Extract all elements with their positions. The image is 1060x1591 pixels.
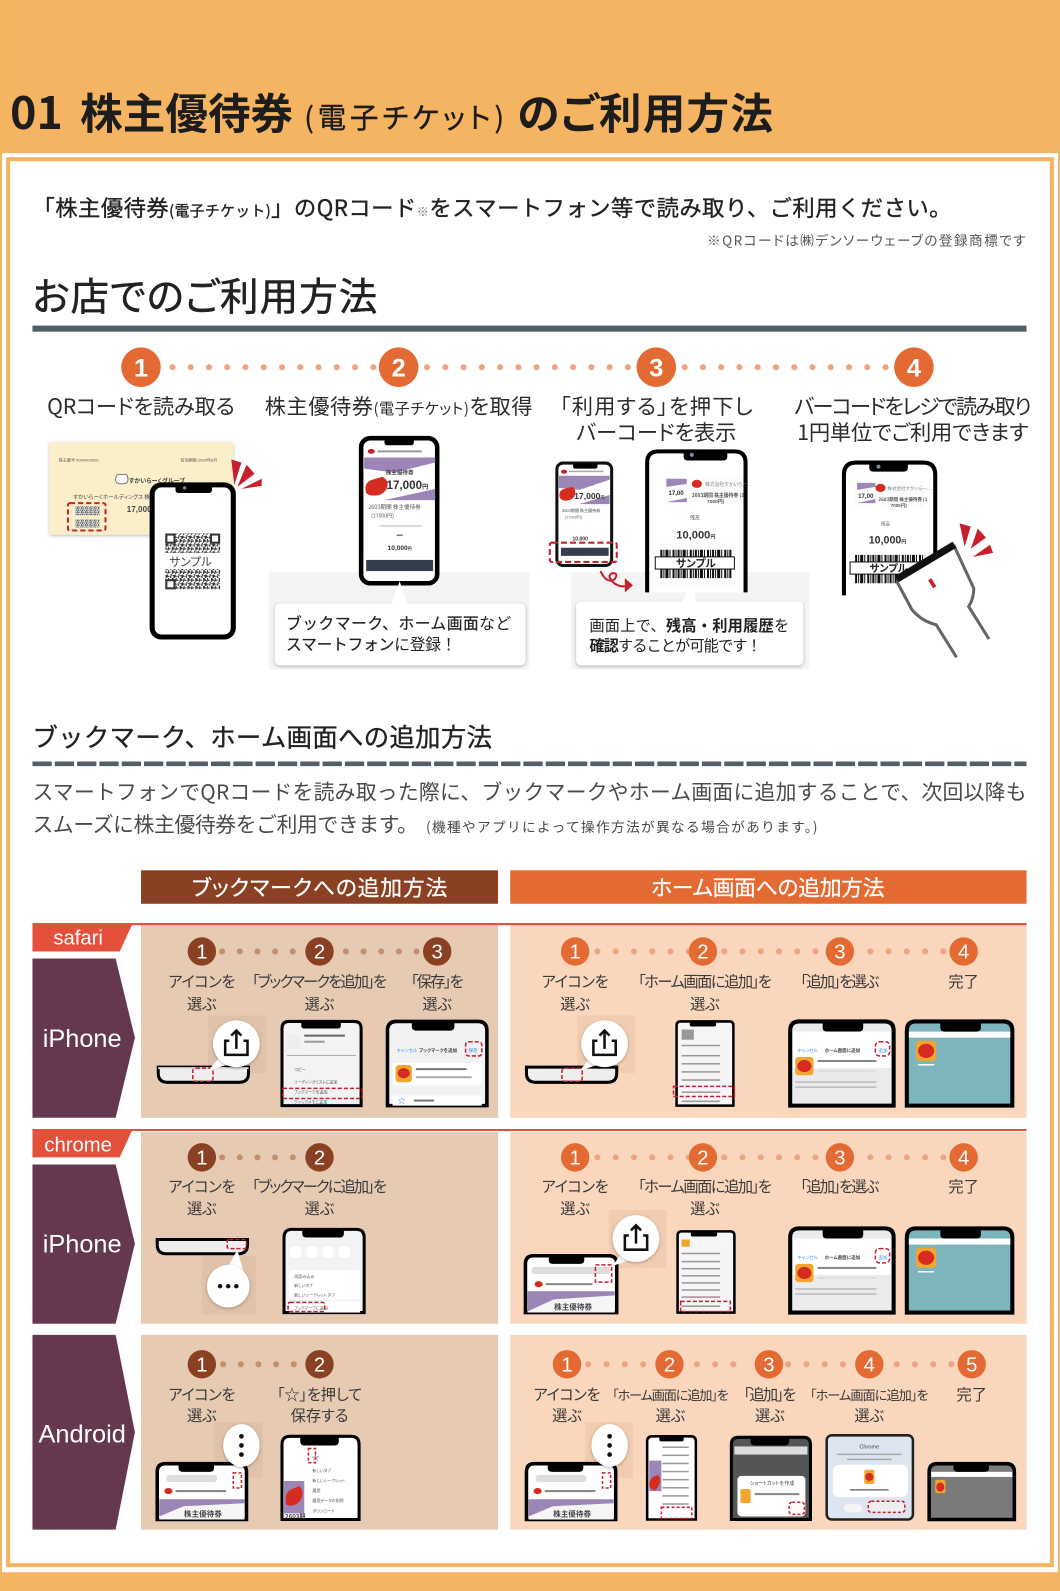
highlight: red dashed box xyxy=(550,543,617,562)
step numbers xyxy=(121,347,934,387)
column header: bookmark: ブックマークへの追加方法 xyxy=(192,872,448,903)
illustration: small phone with button: 10,000 xyxy=(572,537,588,543)
arrow: red curl xyxy=(600,571,633,592)
android bookmark steps: 2 xyxy=(314,1354,325,1376)
illustration: phone with QR: サンプル xyxy=(169,553,213,570)
illustration: phone with barcode: 残高 xyxy=(690,514,700,521)
callout background: step 2 xyxy=(269,572,529,669)
title: (電子チケット) xyxy=(304,96,504,137)
illustration: phone with ticket: 10,000円 xyxy=(388,545,412,552)
android home steps: 選ぶ xyxy=(755,1404,785,1426)
step labels: バーコードを表示 xyxy=(576,416,736,447)
safari bookmark steps: 「保存」を xyxy=(411,970,464,992)
callout background: step 3 xyxy=(571,572,809,669)
safari home illustrations: 追加 xyxy=(878,1047,888,1054)
android bookmark illustrations: 新しいタブ xyxy=(312,1467,331,1474)
illustration: small phone with button: (17000円) xyxy=(565,515,583,519)
chrome bookmark illustrations xyxy=(157,1229,364,1315)
step labels: 1円単位でご利用できます xyxy=(797,416,1029,447)
illustration: barcode scanner xyxy=(897,545,989,657)
chrome bookmark steps: アイコンを xyxy=(168,1175,235,1197)
android home illustrations: Chrome xyxy=(859,1444,879,1450)
illustration: QR ticket card: 有効期限 2026年8月 xyxy=(181,457,217,463)
chrome home steps: 選ぶ xyxy=(690,1197,720,1219)
android bookmark steps xyxy=(168,1350,362,1426)
illustration: phone at register: 2603期間 株主優待券 (1 xyxy=(878,496,928,503)
safari bookmark illustrations: キャンセル xyxy=(396,1048,418,1054)
step labels: バーコードをレジで読み取り xyxy=(794,390,1032,421)
callout: balance: 確認することが可能です！ xyxy=(589,634,762,656)
chrome bookmark steps: 「ブックマークに追加」を xyxy=(252,1175,387,1197)
chrome home steps: 2 xyxy=(697,1147,709,1169)
android bookmark illustrations: ダウンロード xyxy=(312,1507,335,1514)
illustration: QR ticket card: 株主番号 0000000000 xyxy=(59,457,99,463)
android home steps: 「ホーム画面に追加」を xyxy=(810,1385,929,1404)
illustration: phone at register: 17,00 xyxy=(858,493,874,500)
safari bookmark illustrations: ブックマークを追加 xyxy=(294,1088,328,1095)
android home steps: 4 xyxy=(864,1354,875,1376)
safari home illustrations: キャンセル xyxy=(797,1048,818,1054)
chrome home steps: 選ぶ xyxy=(560,1197,590,1219)
android home steps: 1 xyxy=(561,1354,573,1376)
safari bookmark steps: 1 xyxy=(196,942,208,964)
chrome bookmark illustrations: ブックマークに追加 xyxy=(294,1305,328,1312)
android home steps: 「ホーム画面に追加」を xyxy=(612,1385,729,1404)
intro sentence: 「株主優待券(電子チケット)」のQRコード※をスマートフォン等で読み取り、ご利用ください。 xyxy=(32,191,951,223)
safari bookmark illustrations: リーディングリストに追加 xyxy=(294,1078,337,1085)
android bookmark steps: 「☆」を押して xyxy=(277,1383,362,1405)
chrome home steps: 完了 xyxy=(948,1175,979,1197)
callout: balance xyxy=(576,581,803,665)
illustration: phone at register: 残高 xyxy=(881,520,891,527)
safari bookmark steps: 選ぶ xyxy=(422,992,452,1014)
safari bookmark illustrations: コピー xyxy=(294,1067,306,1073)
android bookmark illustrations: ☆ xyxy=(311,1454,320,1463)
safari home steps: 「追加」を選ぶ xyxy=(800,970,880,992)
android bookmark illustrations xyxy=(157,1422,359,1520)
trademark note: ※QRコードは㈱デンソーウェーブの登録商標です xyxy=(707,229,1026,249)
android home steps: 選ぶ xyxy=(656,1404,685,1426)
callout: register: スマートフォンに登録！ xyxy=(286,632,456,655)
android home illustrations: ショートカットを作成 xyxy=(750,1480,794,1487)
row label: Android xyxy=(32,1335,135,1530)
chrome home steps: アイコンを xyxy=(542,1175,609,1197)
illustration: phone with barcode: サンプル xyxy=(676,556,716,571)
paragraph: (機種やアプリによって操作方法が異なる場合があります。) xyxy=(426,816,818,836)
illustration: phone with ticket: (17000円) xyxy=(371,513,394,519)
safari bookmark steps: 2 xyxy=(314,942,325,964)
callout: register xyxy=(275,581,525,665)
row label: Android: Android xyxy=(38,1420,126,1448)
illustration: phone with barcode: 株式会社すかいらー... xyxy=(705,481,751,488)
chrome home illustrations: 追加 xyxy=(878,1254,888,1261)
safari bookmark illustrations: 保存 xyxy=(469,1047,478,1054)
column header: home screen xyxy=(510,870,1027,904)
illustration: QR ticket card: すかいらーくグループ xyxy=(129,476,185,485)
icon: scanner sparkle xyxy=(960,523,993,557)
step numbers: 4 xyxy=(907,354,921,382)
paragraph: スムーズに株主優待券をご利用できます。 xyxy=(32,808,418,838)
safari home steps: 選ぶ xyxy=(560,992,590,1014)
android home steps: 選ぶ xyxy=(854,1404,884,1426)
step numbers: 2 xyxy=(392,354,406,382)
safari bookmark steps: 3 xyxy=(432,942,443,964)
android home illustrations xyxy=(526,1422,1014,1519)
chrome bookmark illustrations: 新しいタブ xyxy=(294,1282,313,1289)
illustration: phone with QR xyxy=(152,485,233,637)
chrome home steps: 1 xyxy=(569,1147,581,1169)
chrome home illustrations: キャンセル xyxy=(797,1255,818,1261)
chrome bookmark steps xyxy=(168,1143,387,1219)
callout: balance: 画面上で、残高・利用履歴を xyxy=(589,614,789,636)
illustration: small phone with button xyxy=(557,463,612,565)
chrome home illustrations xyxy=(525,1210,1012,1313)
illustration: phone with ticket: 17,000円 xyxy=(386,479,428,492)
android home steps: 「追加」を xyxy=(744,1383,796,1405)
illustration: phone with ticket: 株主優待券 xyxy=(386,469,414,477)
paragraph xyxy=(32,775,1027,838)
chrome bookmark steps: 2 xyxy=(314,1147,325,1169)
android bookmark illustrations: 株主優待券 xyxy=(184,1508,222,1519)
column header: home screen: ホーム画面への追加方法 xyxy=(651,872,885,903)
tag: chrome xyxy=(32,1129,1027,1157)
tag: safari xyxy=(32,923,1027,951)
safari bookmark steps: アイコンを xyxy=(168,970,235,992)
safari bookmark illustrations: ブックマークを追加 xyxy=(419,1047,458,1054)
safari bookmark steps xyxy=(168,937,464,1014)
safari home steps: 3 xyxy=(834,942,846,964)
android bookmark steps: 選ぶ xyxy=(187,1404,217,1426)
row label: iPhone chrome xyxy=(32,1164,135,1324)
illustration: QR ticket card: すかいらーくホールディングス 株主 xyxy=(73,493,156,501)
chrome home steps: 4 xyxy=(958,1147,969,1169)
chrome home illustrations: ホーム画面に追加 xyxy=(825,1254,861,1261)
heading: store usage: お店でのご利用方法 xyxy=(32,266,377,322)
step labels: QRコードを読み取る xyxy=(47,390,235,421)
step numbers: 3 xyxy=(649,354,663,382)
row label: iPhone chrome: iPhone xyxy=(43,1231,122,1259)
title xyxy=(10,77,773,142)
illustration: QR ticket card: 17,000 xyxy=(127,505,152,514)
title: のご利用方法 xyxy=(517,81,773,142)
android home steps: 5 xyxy=(966,1354,977,1376)
chrome bookmark steps: 1 xyxy=(196,1147,208,1169)
android home steps: 完了 xyxy=(957,1383,987,1405)
safari home steps: 4 xyxy=(958,942,969,964)
illustration: small phone with button: 17,000円 xyxy=(574,491,605,501)
chrome bookmark illustrations: 新しいシークレット タブ xyxy=(294,1291,335,1298)
step numbers: 1 xyxy=(134,354,148,382)
safari home illustrations: ホーム画面に追加 xyxy=(825,1047,861,1054)
column header: bookmark xyxy=(141,870,498,904)
illustration: phone with barcode: 7000円) xyxy=(707,499,725,505)
android bookmark illustrations: 新しいシークレット xyxy=(312,1477,345,1484)
chrome home steps: 「追加」を選ぶ xyxy=(800,1175,880,1197)
illustration: QR ticket card xyxy=(50,442,233,535)
chrome home steps xyxy=(542,1143,979,1219)
safari home steps: 完了 xyxy=(948,970,979,992)
paragraph: スマートフォンでQRコードを読み取った際に、ブックマークやホーム画面に追加することで、次回以降も xyxy=(32,775,1027,805)
android bookmark steps: 保存する xyxy=(291,1404,348,1426)
illustration: phone at register: 7000円) xyxy=(891,503,907,508)
safari home steps: 選ぶ xyxy=(690,992,720,1014)
android bookmark illustrations: 履歴データの削除 xyxy=(312,1497,344,1504)
android home steps: アイコンを xyxy=(534,1383,600,1405)
android home steps xyxy=(534,1350,987,1426)
illustration: phone at register: サンプル xyxy=(870,560,908,575)
subheading: add methods: ブックマーク、ホーム画面への追加方法 xyxy=(32,719,492,755)
illustration: phone with barcode: 2603期間 株主優待券 (1 xyxy=(692,492,744,499)
android home steps: 3 xyxy=(763,1354,775,1376)
safari home steps: 「ホーム画面に追加」を xyxy=(638,970,772,992)
chrome bookmark steps: 選ぶ xyxy=(305,1197,334,1219)
safari bookmark steps: 選ぶ xyxy=(187,992,217,1014)
chrome bookmark illustrations: 再読み込み xyxy=(294,1273,314,1280)
illustration: phone at register: 10,000円 xyxy=(869,535,906,547)
android bookmark steps: 1 xyxy=(196,1354,208,1376)
chrome home steps: 3 xyxy=(834,1147,846,1169)
step labels xyxy=(47,390,1032,447)
safari bookmark illustrations xyxy=(158,1015,487,1106)
safari home steps: 1 xyxy=(569,942,581,964)
safari home steps: アイコンを xyxy=(542,970,609,992)
chrome home illustrations: 株主優待券 xyxy=(554,1302,592,1313)
row label: iPhone safari: iPhone xyxy=(43,1025,122,1053)
illustration: small phone with button: 2603期間 株主優待券 xyxy=(562,507,600,514)
dashed rule xyxy=(32,762,1027,766)
illustration: phone with barcode: 17,00 xyxy=(668,490,684,497)
panels xyxy=(141,925,1027,1530)
illustration: phone with barcode xyxy=(647,451,751,592)
android bookmark illustrations: 2603期 xyxy=(285,1511,305,1520)
chrome home steps: 「ホーム画面に追加」を xyxy=(638,1175,772,1197)
step connector dots xyxy=(172,364,890,370)
android home illustrations: 株主優待券 xyxy=(553,1508,591,1519)
illustration: phone at register xyxy=(844,463,935,595)
title: 株主優待券 xyxy=(80,81,293,142)
illustration: phone with ticket: 2603期間 株主優待券 xyxy=(368,503,421,511)
tag: safari: safari xyxy=(53,927,103,949)
safari bookmark illustrations: クイックメモに追加 xyxy=(294,1099,327,1106)
safari bookmark illustrations: ☆ xyxy=(398,1097,406,1106)
android bookmark steps: アイコンを xyxy=(168,1383,235,1405)
android bookmark illustrations: 履歴 xyxy=(312,1487,321,1494)
safari bookmark steps: 「ブックマークを追加」を xyxy=(252,970,387,992)
safari home steps: 2 xyxy=(697,942,709,964)
title: 01 xyxy=(10,77,63,142)
safari home steps xyxy=(542,937,979,1014)
chrome bookmark steps: 選ぶ xyxy=(187,1197,217,1219)
step labels: 「利用する」を押下し xyxy=(560,390,753,421)
android home steps: 2 xyxy=(664,1354,675,1376)
heading rule xyxy=(32,326,1027,332)
android home steps: 選ぶ xyxy=(552,1404,582,1426)
icon: card sparkle xyxy=(231,459,262,489)
callout: register: ブックマーク、ホーム画面など xyxy=(286,611,512,634)
illustration: phone with ticket xyxy=(361,438,437,583)
safari home illustrations xyxy=(526,1015,1012,1106)
tag: chrome: chrome xyxy=(44,1134,112,1156)
row label: iPhone safari xyxy=(32,959,135,1118)
illustration: phone at register: 株式会社すかいらー... xyxy=(888,485,931,492)
step labels: 株主優待券(電子チケット)を取得 xyxy=(265,390,533,421)
illustration: phone with barcode: 10,000円 xyxy=(676,530,715,542)
safari bookmark steps: 選ぶ xyxy=(305,992,334,1014)
